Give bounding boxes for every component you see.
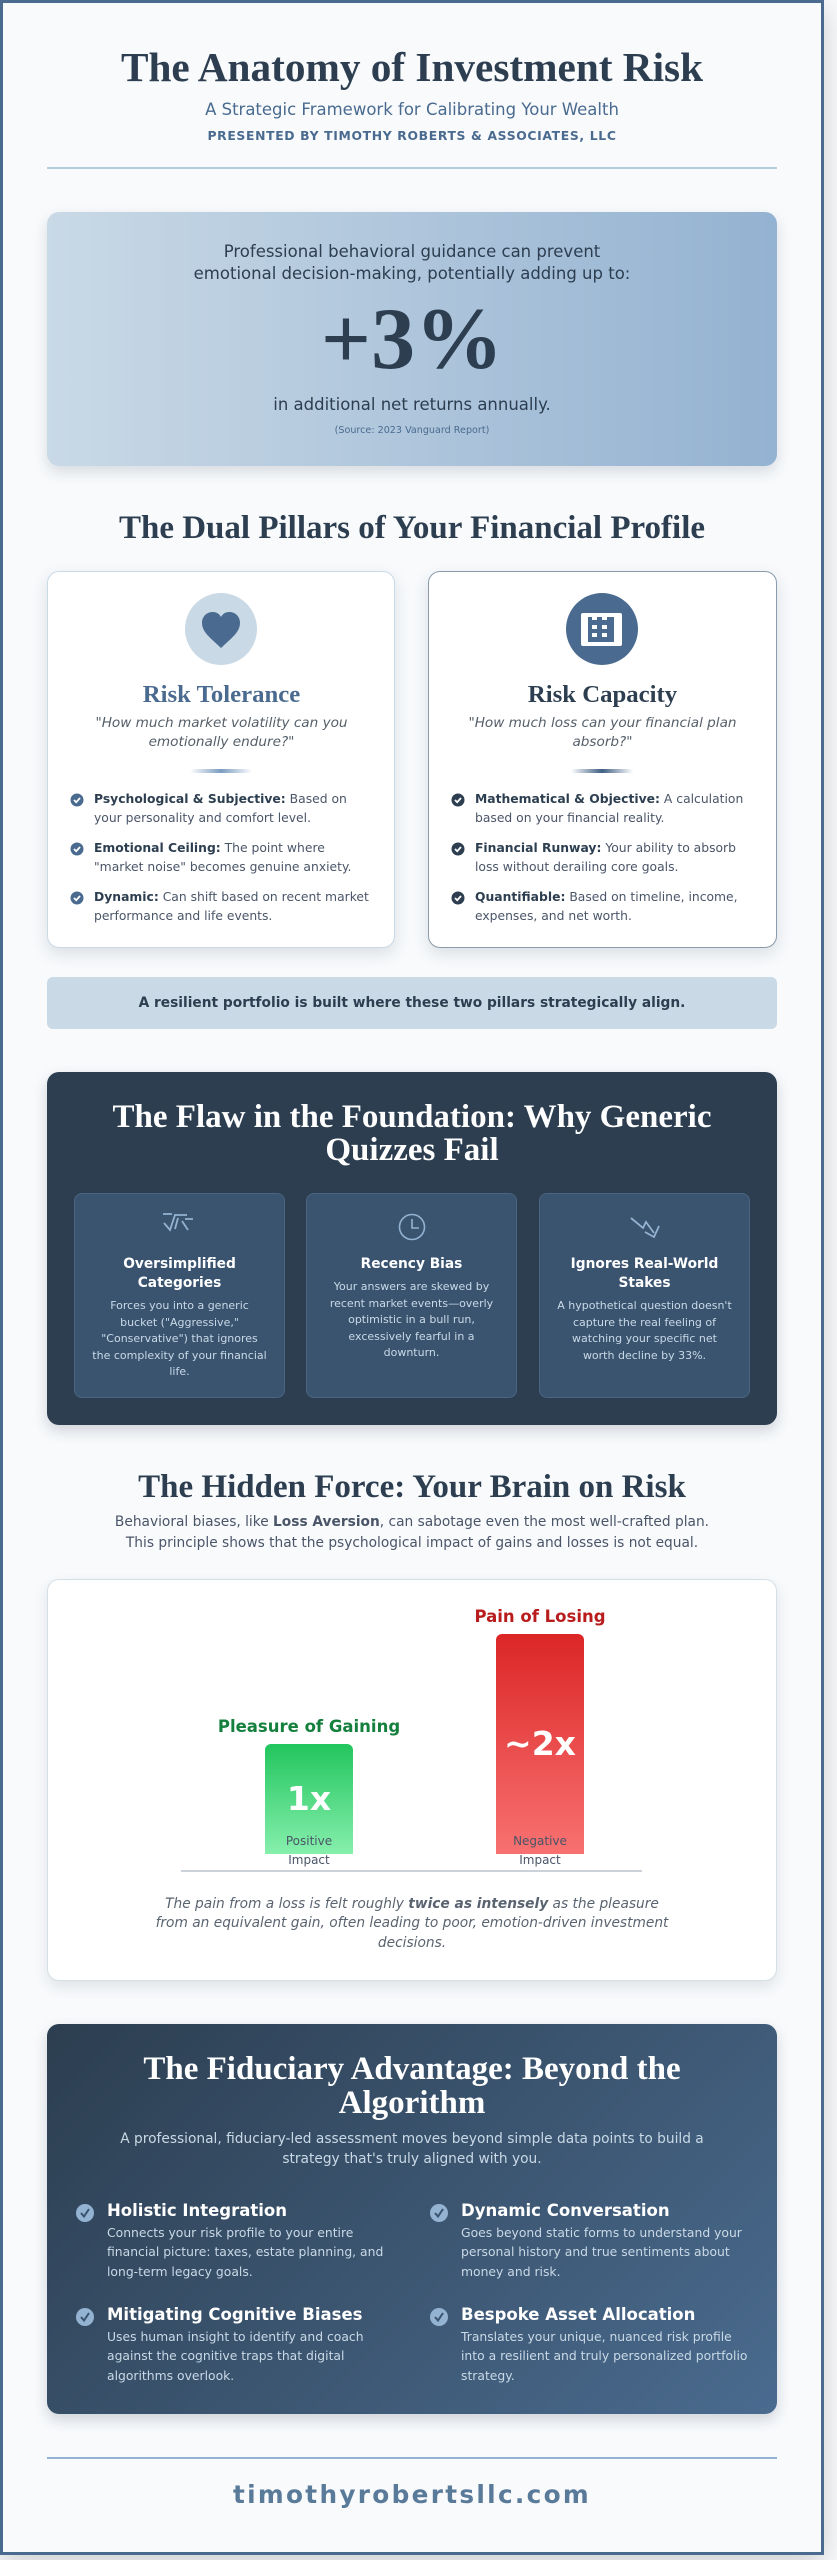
- gain bar: 1x: [287, 1779, 331, 1818]
- item title: Dynamic Conversation: [461, 2201, 670, 2220]
- bullet 3: [94, 890, 369, 923]
- item text: against the cognitive traps that digital: [107, 2349, 344, 2363]
- bullet 2: [94, 841, 351, 874]
- panel: loss aversion chart: [47, 1579, 777, 1981]
- card text: A hypothetical question doesn't: [557, 1299, 732, 1312]
- item: mitigating biases: [76, 2305, 416, 2390]
- item: holistic integration: [76, 2201, 383, 2279]
- bullet 1: [475, 792, 743, 825]
- card title: Risk Capacity: [528, 681, 677, 708]
- bullet list: [452, 792, 743, 923]
- card: real-world stakes: [539, 1193, 750, 1398]
- title: The Anatomy of Investment Risk: [121, 44, 703, 90]
- bullet 1: Psychological & Subjective: Based on: [94, 792, 347, 806]
- card heading: [123, 1256, 236, 1291]
- icon: signs: [163, 1213, 193, 1232]
- hidden force intro: [115, 1514, 709, 1551]
- gain impact label: Positive: [286, 1834, 332, 1848]
- loss impact label: Impact: [519, 1853, 561, 1867]
- card text: [330, 1280, 493, 1359]
- bullet 2: "market noise" becomes genuine anxiety.: [94, 860, 351, 874]
- hero caption: in additional net returns annually.: [273, 395, 551, 414]
- check icons: [70, 794, 84, 904]
- bullet 3: expenses, and net worth.: [475, 909, 632, 923]
- heading: dual pillars: The Dual Pillars of Your Financial Profile: [119, 510, 705, 546]
- footer url: timothyrobertsllc.com: [233, 2480, 591, 2509]
- card text: the complexity of your financial: [92, 1348, 267, 1362]
- hero stat panel: [47, 212, 777, 466]
- bullet 2: Financial Runway: Your ability to absorb: [475, 841, 736, 855]
- card heading: Ignores Real-World: [571, 1256, 718, 1272]
- bullet 1: your personality and comfort level.: [94, 811, 311, 825]
- card text: recent market events—overly: [330, 1296, 493, 1310]
- heading: flaw: Quizzes Fail: [325, 1132, 499, 1168]
- item text: financial picture: taxes, estate planning, and: [107, 2245, 383, 2259]
- icon: heart: [185, 593, 257, 665]
- bar group: gain: [218, 1717, 400, 1867]
- chart caption: The pain from a loss is felt roughly twice as intensely as the pleasure: [165, 1896, 659, 1912]
- item text: algorithms overlook.: [107, 2369, 234, 2383]
- card text: [557, 1299, 732, 1362]
- card heading: Categories: [138, 1275, 221, 1291]
- item: dynamic conversation: [430, 2201, 742, 2279]
- card text: downturn.: [384, 1346, 439, 1359]
- bullet 2: Emotional Ceiling: The point where: [94, 841, 325, 855]
- hero intro text: [194, 242, 630, 283]
- heading: hidden force: The Hidden Force: Your Brain on Risk: [138, 1469, 686, 1505]
- card heading: Recency Bias: [361, 1256, 462, 1272]
- card text: capture the real feeling of: [573, 1316, 716, 1328]
- item text: [461, 2328, 747, 2386]
- bar chart: [181, 1607, 642, 1872]
- card question: [95, 715, 348, 750]
- bullet 2: loss without derailing core goals.: [475, 860, 678, 874]
- card title: Risk Tolerance: [143, 681, 300, 708]
- check icon: [430, 2204, 448, 2222]
- card question: "How much loss can your financial plan: [468, 715, 737, 731]
- item: bespoke allocation: [430, 2305, 770, 2390]
- gain impact label: Impact: [288, 1853, 330, 1867]
- item title: Mitigating Cognitive Biases: [107, 2305, 363, 2324]
- panel: flaw in the foundation: [47, 1072, 777, 1425]
- fiduciary intro: strategy that's truly aligned with you.: [282, 2151, 542, 2167]
- bullet 3: performance and life events.: [94, 909, 272, 923]
- heading: flaw: The Flaw in the Foundation: Why Generic: [113, 1099, 711, 1135]
- item text: personal history and true sentiments about: [461, 2245, 730, 2259]
- item text: money and risk.: [461, 2265, 561, 2279]
- icon: clock: [398, 1214, 426, 1240]
- chart caption: decisions.: [378, 1935, 446, 1951]
- bullet 1: Mathematical & Objective: A calculation: [475, 792, 743, 806]
- hidden force intro: This principle shows that the psychological impact of gains and losses is not equal.: [126, 1535, 698, 1551]
- presenter line: PRESENTED BY TIMOTHY ROBERTS & ASSOCIATES, LLC: [207, 129, 617, 143]
- icon: trend down: [630, 1217, 660, 1238]
- item text: [107, 2226, 383, 2279]
- heading: fiduciary: [143, 2051, 681, 2121]
- card text: watching your specific net: [572, 1332, 717, 1345]
- card heading: Oversimplified: [123, 1256, 236, 1272]
- subtitle: A Strategic Framework for Calibrating Your Wealth: [205, 100, 619, 119]
- item text: [461, 2226, 742, 2279]
- bullet 3: [475, 890, 738, 923]
- gain bar: [265, 1744, 353, 1854]
- item text: Uses human insight to identify and coach: [107, 2330, 364, 2344]
- item text: long-term legacy goals.: [107, 2265, 253, 2279]
- card heading: [571, 1256, 718, 1291]
- hero source: (Source: 2023 Vanguard Report): [335, 425, 489, 436]
- hidden force intro: Behavioral biases, like Loss Aversion, can sabotage even the most well-crafted plan.: [115, 1514, 709, 1530]
- bullet list: [70, 792, 369, 923]
- card question: absorb?": [572, 734, 633, 750]
- card: oversimplified: [74, 1193, 285, 1398]
- callout: alignment: [47, 977, 777, 1029]
- panel: risk tolerance: [47, 571, 395, 948]
- item text: into a resilient and truly personalized portfolio: [461, 2349, 747, 2363]
- item text: Translates your unique, nuanced risk profile: [461, 2330, 732, 2344]
- card text: Your answers are skewed by: [334, 1280, 489, 1293]
- bar group: loss: [474, 1607, 606, 1867]
- item title: Bespoke Asset Allocation: [461, 2305, 695, 2324]
- card text: life.: [169, 1365, 190, 1378]
- bullet 1: [94, 792, 347, 825]
- fiduciary intro: A professional, fiduciary-led assessment moves beyond simple data points to build a: [120, 2131, 704, 2147]
- icon: calendar: [566, 593, 638, 665]
- bullet 3: Dynamic: Can shift based on recent market: [94, 890, 369, 904]
- card text: "Conservative") that ignores: [101, 1332, 258, 1345]
- card question: [468, 715, 737, 750]
- check icon: [76, 2308, 94, 2326]
- heading: flaw: [113, 1099, 711, 1168]
- loss bar: ~2x: [504, 1724, 576, 1763]
- heading: fiduciary: The Fiduciary Advantage: Beyond the: [143, 2051, 681, 2087]
- card text: worth decline by 33%.: [583, 1348, 706, 1362]
- panel: risk capacity: [428, 571, 777, 948]
- item title: Holistic Integration: [107, 2201, 287, 2220]
- item text: strategy.: [461, 2369, 515, 2383]
- card text: optimistic in a bull run,: [348, 1313, 475, 1326]
- header: [121, 44, 703, 143]
- item text: Connects your risk profile to your entire: [107, 2226, 353, 2240]
- check icon: [430, 2308, 448, 2326]
- card question: emotionally endure?": [149, 734, 294, 750]
- fiduciary intro: [120, 2131, 704, 2167]
- loss impact label: Negative: [513, 1834, 567, 1848]
- bullet 1: based on your financial reality.: [475, 811, 664, 825]
- check icon: [76, 2204, 94, 2222]
- heading: fiduciary: Algorithm: [339, 2085, 485, 2121]
- bullet 2: [475, 841, 736, 874]
- bullet 3: Quantifiable: Based on timeline, income,: [475, 890, 738, 904]
- gain label: Pleasure of Gaining: [218, 1717, 400, 1736]
- card question: "How much market volatility can you: [95, 715, 348, 731]
- card text: [92, 1299, 267, 1378]
- hero intro text: emotional decision-making, potentially adding up to:: [194, 264, 630, 283]
- card text: bucket ("Aggressive,": [120, 1316, 239, 1328]
- loss impact label: [513, 1834, 567, 1867]
- callout: alignment: A resilient portfolio is built where these two pillars strategically align.: [139, 995, 685, 1011]
- panel: fiduciary advantage: [47, 2024, 777, 2414]
- item text: Goes beyond static forms to understand your: [461, 2226, 742, 2240]
- card: recency bias: [306, 1193, 517, 1398]
- hero intro text: Professional behavioral guidance can prevent: [224, 242, 600, 261]
- loss bar: [496, 1634, 584, 1854]
- item text: [107, 2328, 364, 2386]
- check icons: [452, 794, 464, 904]
- gain impact label: [286, 1834, 332, 1867]
- chart caption: from an equivalent gain, often leading to poor, emotion-driven investment: [156, 1915, 668, 1931]
- card text: Forces you into a generic: [110, 1299, 249, 1312]
- card text: excessively fearful in a: [348, 1330, 475, 1342]
- chart caption: [156, 1896, 669, 1951]
- loss label: Pain of Losing: [474, 1607, 606, 1626]
- card heading: Stakes: [618, 1275, 671, 1291]
- hero stat +3%: +3%: [321, 291, 503, 388]
